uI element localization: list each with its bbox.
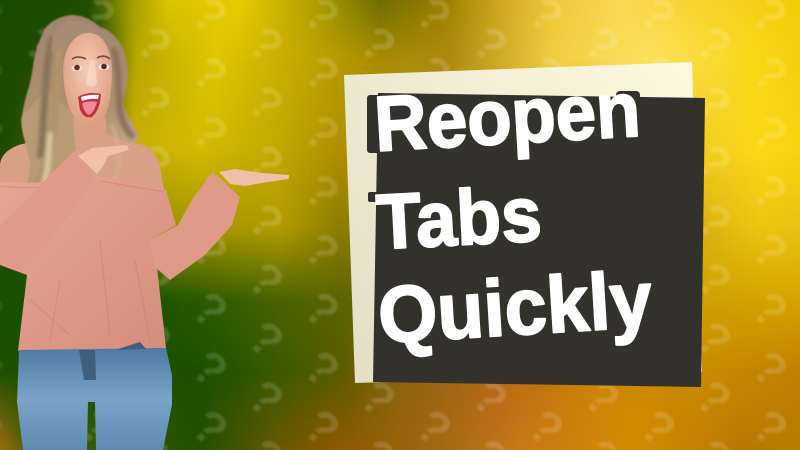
- waist shadow and fly: [79, 342, 146, 380]
- hair strands: [36, 40, 132, 190]
- blouse folds: [0, 181, 165, 340]
- hair top part: [52, 21, 100, 52]
- jeans: [17, 348, 172, 450]
- panel: cream back card: [344, 62, 702, 383]
- pointing sleeve: [0, 150, 96, 272]
- open mouth: [78, 93, 101, 117]
- presenting sleeve: [150, 172, 240, 280]
- hair back: [22, 15, 140, 200]
- blouse body: [0, 176, 176, 351]
- title: Reopen Tabs Quickly: [372, 65, 655, 360]
- photo: surprised woman presenting: [0, 15, 289, 450]
- neck and chest skin: [0, 118, 164, 190]
- face: [63, 33, 112, 127]
- title line: Quickly: Quickly: [376, 254, 655, 360]
- hair over left shoulder: [22, 90, 76, 200]
- eyes and brows: [72, 56, 110, 86]
- open palm hand: [219, 169, 289, 186]
- pointing hand: [78, 145, 129, 174]
- title line: Tabs: Tabs: [374, 169, 544, 266]
- title line: Reopen: Reopen: [372, 65, 643, 168]
- panel: dark title card: [367, 91, 705, 387]
